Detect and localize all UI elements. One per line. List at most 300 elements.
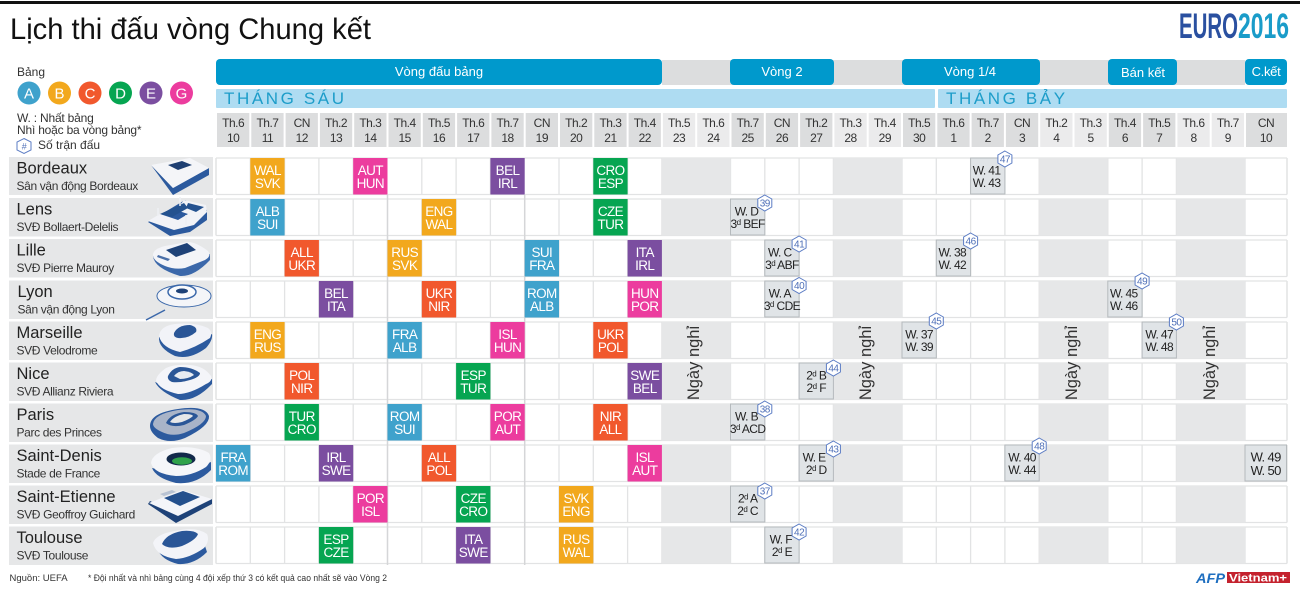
knockout match 43 [799,441,840,481]
day headers: Th.2 [325,116,348,130]
knockout match 41: 3 [765,258,771,272]
match: POL NIR [285,363,319,400]
legend: groups and symbols: E [146,86,156,102]
match: ITA SWE: ITA [464,532,483,547]
day headers: Th.7 [977,116,1000,130]
day headers: Th.4 [394,116,416,130]
knockout match 44: 44 [828,364,839,374]
knockout match 40: W. A [769,286,792,300]
match: SWE BEL: SWE [630,368,660,383]
match: ENG RUS [250,322,285,358]
panel: Saint-Etienne: SVĐ Geoffroy Guichard [16,508,135,522]
knockout match 46 [936,233,978,276]
knockout match 45 [902,313,943,358]
match: IRL SWE: IRL [326,450,347,465]
match: UKR NIR [422,281,456,318]
day headers: Th.7 [497,116,519,130]
panel: Lens [9,197,213,236]
knockout match 45: W. 37 [905,328,934,342]
match: BEL IRL: IRL [498,176,518,191]
day headers: 3 [1019,131,1026,145]
match: WAL SVK [250,158,285,194]
match: CZE CRO: CZE [461,491,486,506]
day headers: CN [774,116,790,130]
knockout match 43: d [812,464,816,473]
legend: groups and symbols: Số trận đấu [38,138,100,152]
match: ROM SUI: SUI [394,422,415,437]
match: ISL AUT [628,445,662,482]
knockout match 41 [765,236,806,276]
knockout match 37: A [748,492,758,506]
day headers: 8 [1190,131,1197,145]
knockout match 37: C [747,504,759,518]
round bars: Vòng đấu bảng [395,64,483,79]
day headers: Th.6 [942,116,965,130]
day headers: Th.7 [737,116,759,130]
panel: Nice: SVĐ Allianz Riviera [16,384,114,398]
match: ENG WAL: ENG [425,204,453,219]
match: ESP TUR: ESP [461,368,486,383]
match: IRL SWE [319,445,353,482]
match: POR ISL: ISL [361,504,381,519]
day headers: Th.7 [1217,116,1240,130]
match: SWE BEL [628,363,662,400]
knockout match 50: W. 47 [1145,328,1174,342]
match: ITA IRL: ITA [636,245,654,260]
knockout match 49: W. 46 [1110,299,1139,313]
match: ROM ALB: ALB [530,299,554,314]
match: RUS WAL: WAL [563,545,591,560]
day headers: 12 [296,131,309,145]
panel: Lille [9,239,213,278]
day headers: 10 [227,131,240,145]
panel: Lyon [9,280,213,320]
knockout match 39: d [737,218,741,227]
rest day labels [685,326,1219,400]
match: SUI FRA: SUI [531,245,552,260]
panel: Nice: Nice [16,365,50,383]
knockout match 50: 50 [1171,318,1182,328]
knockout match 48: W. 40 [1008,450,1037,464]
day headers: 1 [950,131,957,145]
match: RUS WAL: RUS [563,532,590,547]
day headers: 24 [707,131,720,145]
knockout match 47 [971,151,1012,194]
match: AUT HUN: AUT [358,163,383,178]
knockout match 43: W. E [803,450,826,464]
panel: Paris [9,404,213,442]
panel: Lille: Lille [16,242,46,260]
day headers: Th.4 [874,116,897,130]
match: ALB SUI: SUI [257,217,278,232]
match: ALL POL: POL [426,463,453,478]
day headers: 11 [262,131,274,145]
day headers: 10 [1260,131,1273,145]
panel: Saint-Etienne [9,486,213,524]
round bars: C.kết [1252,64,1281,79]
panel: Bordeaux [9,157,213,195]
source note: Nguồn: UEFA [10,573,68,584]
knockout match 37: 2 [738,492,744,506]
day headers: 9 [1225,131,1232,145]
match: UKR POL: UKR [597,327,625,342]
knockout match 42 [765,524,806,563]
panel: Lille: SVĐ Pierre Mauroy [16,261,114,275]
panel: Paris: Parc des Princes [16,426,102,440]
match: POL NIR: NIR [291,381,313,396]
knockout match 39: 3 [731,217,737,231]
day headers: Th.4 [634,116,657,130]
knockout match 38: 38 [760,404,771,416]
match: SVK ENG: ENG [562,504,590,519]
panel: Saint-Denis: Stade de France [16,466,101,480]
knockout match 48: 48 [1034,442,1045,452]
match: ALB SUI [250,199,285,236]
knockout match 44: d [812,370,816,378]
match: POR AUT [490,404,525,440]
knockout match 37 [730,483,772,522]
knockout match 38: ACD [740,422,766,436]
knockout match 46: 46 [966,236,977,248]
knockout match 44: d [813,382,817,391]
match: ROM ALB [525,281,559,318]
match: ENG WAL [422,199,456,236]
match: ISL HUN [490,322,525,358]
match: ALL UKR: ALL [291,245,314,260]
knockout match 39 [730,195,772,235]
match: ALL UKR: UKR [288,258,316,273]
match: BEL ITA [319,281,353,318]
panel: Toulouse: Toulouse [16,529,83,547]
match: HUN POR [628,281,662,318]
match: FRA ALB: FRA [392,327,418,342]
knockout match 44: 2 [807,381,813,395]
match: WAL SVK: WAL [254,163,282,178]
day headers: 6 [1122,131,1129,145]
match: ISL AUT: AUT [632,463,658,478]
legend: groups and symbols: Nhì hoặc ba vòng bảng* [17,123,142,137]
day headers: Th.2 [1045,116,1068,130]
logo: Euro 2016: EURO [1179,7,1238,46]
match: FRA ROM: FRA [221,450,246,465]
day headers: Th.3 [359,116,382,130]
match: UKR NIR: NIR [428,299,451,314]
day headers: 29 [879,131,892,145]
match: ISL AUT: ISL [636,450,655,465]
knockout match 37: d [744,492,748,502]
match: RUS SVK: SVK [392,258,418,273]
day headers: Th.7 [256,116,279,130]
legend: groups and symbols [17,65,193,154]
day headers [222,113,1287,147]
match: UKR POL [593,322,628,358]
panel: Marseille [9,322,213,360]
knockout match 41: ABF [775,258,799,272]
match: ESP TUR [456,363,490,400]
match: BEL IRL: BEL [496,163,520,178]
panel: Bordeaux: Sân vận động Bordeaux [16,179,138,193]
legend: groups and symbols: C [85,86,96,102]
final match [1245,445,1286,481]
final match: W. 49 [1251,450,1281,464]
day headers: 2 [985,131,992,145]
match: POR AUT: POR [494,409,522,424]
knockout match 43: D [816,463,828,477]
match: NIR ALL [593,404,628,440]
match: NIR ALL: NIR [600,409,622,424]
match: ALB SUI: ALB [256,204,280,219]
match: SVK ENG [559,486,593,522]
day headers: 16 [433,131,446,145]
logo: AFP Vietnam+ [1195,570,1290,586]
day headers: Th.3 [840,116,862,130]
match: FRA ALB: ALB [393,340,417,355]
knockout match 43: 2 [806,463,812,477]
match: ALL POL: ALL [428,450,451,465]
knockout match 50 [1142,314,1183,358]
match: POR ISL [353,486,388,522]
legend: groups and symbols: Bảng [17,65,45,79]
match: HUN POR: HUN [631,286,658,301]
knockout match 47: W. 43 [973,176,1001,190]
panel: Bordeaux: Bordeaux [16,160,88,178]
rest day labels: Ngày nghỉ [857,326,875,400]
footnote: * Đội nhất và nhì bảng cùng 4 đội xếp thứ 3 có kết quả cao nhất sẽ vào Vòng 2 [88,573,387,584]
panel: Lens: SVĐ Bollaert-Delelis [16,220,119,234]
match: ROM SUI [388,404,422,440]
schedule grid [216,158,1287,565]
day headers: 30 [913,131,926,145]
match: ROM SUI: ROM [390,409,420,424]
day headers: Th.5 [668,116,691,130]
day headers: Th.6 [1183,116,1205,130]
knockout match 38: 3 [730,422,736,436]
day headers: Th.5 [428,116,451,130]
match: ITA SWE: SWE [459,545,488,560]
knockout match 48 [1005,438,1046,481]
knockout match 38: d [736,423,740,432]
day headers: Th.6 [462,116,485,130]
knockout match 49: W. 45 [1110,286,1139,300]
day headers: Th.6 [702,116,725,130]
match: HUN POR: POR [631,299,659,314]
knockout match 42: 42 [794,528,805,538]
match: AUT HUN: HUN [357,176,384,191]
knockout match 40: 3 [764,299,770,313]
match: AUT HUN [353,158,388,194]
knockout match 50: W. 48 [1145,340,1174,354]
panel: Saint-Etienne: Saint-Etienne [16,488,116,506]
match: CRO ESP: ESP [598,176,624,191]
match: SVK ENG: SVK [564,491,589,506]
knockout match 47: 47 [1000,154,1011,166]
match: ENG RUS: RUS [254,340,281,355]
panel: Saint-Denis [9,444,213,483]
rest day labels: Ngày nghỉ [1063,326,1081,400]
match: NIR ALL: ALL [599,422,623,437]
match: ROM ALB: ROM [527,286,557,301]
round bars [216,59,1287,85]
legend: groups and symbols: A [24,86,34,102]
month bars: THÁNG SÁU [224,89,347,108]
match: SUI FRA [525,240,559,276]
knockout match 39: 39 [760,198,771,210]
knockout match 42: 2 [772,545,778,559]
knockout match 45: W. 39 [905,340,934,354]
day headers: CN [294,116,310,130]
panel: Lens: Lens [16,200,52,218]
legend: groups and symbols: # [22,142,27,152]
match: RUS WAL [559,527,593,564]
day headers: Th.5 [908,116,931,130]
knockout match 40: CDE [774,299,801,313]
match: ISL HUN: HUN [494,340,521,355]
panel: Nice [9,362,213,401]
day headers: 26 [776,131,789,145]
day headers: 20 [570,131,583,145]
match: ALL UKR [285,240,319,276]
match: CZE CRO: CRO [459,504,487,519]
knockout match 39: W. D [735,204,759,218]
panel: Saint-Denis: Saint-Denis [16,447,102,465]
knockout match 42: d [778,546,782,555]
panel: Toulouse [9,526,213,565]
knockout match 44 [799,360,840,399]
match: BEL ITA: BEL [324,286,349,301]
match: ITA IRL [628,240,662,276]
match: RUS SVK [388,240,422,276]
knockout match 49 [1108,273,1149,317]
knockout match 42: W. F [770,532,792,546]
match: ITA SWE [456,527,490,564]
knockout match 44: 2 [806,368,812,382]
day headers: 15 [398,131,412,145]
match: BEL IRL [490,158,525,194]
logo: AFP Vietnam+: AFP [1195,570,1226,586]
match: ENG WAL: WAL [425,217,454,232]
match: POL NIR: POL [289,368,315,383]
legend: groups and symbols: D [115,86,126,102]
day headers: Th.2 [805,116,828,130]
match: RUS SVK: RUS [391,245,419,260]
day headers: Th.3 [599,116,622,130]
day headers: 22 [639,131,652,145]
match: UKR POL: POL [598,340,624,355]
knockout match 37: d [743,505,747,514]
knockout match 38 [730,401,772,440]
legend: groups and symbols: G [176,86,187,102]
day headers: Th.6 [222,116,245,130]
knockout match 40: 40 [794,281,805,292]
knockout match 43: 43 [828,444,839,456]
match: ITA IRL: IRL [635,258,655,273]
knockout match 42: E [782,545,793,559]
match: BEL ITA: ITA [327,299,346,314]
knockout match 38: W. B [735,410,759,424]
panel: Lyon: Lyon [18,283,53,301]
day headers: 21 [604,131,617,145]
month bars [216,89,1287,108]
match: SUI FRA: FRA [529,258,555,273]
title: Lịch thi đấu vòng Chung kết [10,13,372,46]
day headers: Th.3 [1080,116,1102,130]
knockout match 41: d [771,259,775,268]
day headers: CN [534,116,550,130]
knockout match 44: F [816,381,826,395]
match: POR ISL: POR [357,491,385,506]
day headers: 4 [1053,131,1060,145]
match: ESP CZE [319,527,353,564]
day headers: 17 [467,131,480,145]
day headers: 18 [501,131,515,145]
logo: AFP Vietnam+: Vietnam+ [1229,572,1287,584]
knockout match 46: W. 42 [938,258,967,272]
day headers: 23 [673,131,686,145]
day headers: Th.2 [565,116,588,130]
match: TUR CRO [285,404,319,440]
day headers: 13 [330,131,343,145]
round bars: Vòng 1/4 [944,64,996,79]
match: CZE CRO [456,486,490,522]
knockout match 47: W. 41 [973,164,1001,178]
match: CRO ESP: CRO [596,163,625,178]
day headers: 25 [741,131,755,145]
panel: Paris: Paris [16,406,54,424]
round bars: Vòng 2 [761,64,803,79]
match: ENG RUS: ENG [254,327,281,342]
month bars: THÁNG BẢY [946,89,1068,108]
round bars: Bán kết [1121,65,1165,80]
match: ISL HUN: ISL [498,327,518,342]
knockout match 46: W. 38 [938,246,967,260]
match: FRA ROM: ROM [218,463,248,478]
panel: Toulouse: SVĐ Toulouse [16,548,89,562]
match: CRO ESP [593,158,628,194]
match: SWE BEL: BEL [633,381,658,396]
knockout match 37: 2 [737,504,743,518]
day headers: Th.4 [1114,116,1137,130]
match: CZE TUR [593,199,628,236]
day headers: CN [1258,116,1274,130]
knockout match 41: W. C [768,246,793,260]
legend: groups and symbols: W. : Nhất bảng [17,111,94,125]
rest day labels: Ngày nghỉ [685,326,703,400]
knockout match 40 [764,278,806,317]
match: FRA ALB [388,322,422,358]
day headers: 27 [810,131,823,145]
match: CZE TUR: CZE [598,204,624,219]
final match: W. 50 [1251,463,1281,478]
legend: groups and symbols: B [54,86,65,102]
match: ESP CZE: ESP [323,532,349,547]
day headers: 14 [364,131,377,145]
knockout match 44: B [816,368,827,382]
knockout match 41: 41 [794,240,805,250]
match: WAL SVK: SVK [255,176,281,191]
match: TUR CRO: CRO [288,422,316,437]
panel: Lyon: Sân vận động Lyon [18,302,115,316]
knockout match 39: BEF [740,217,765,231]
match: FRA ROM [216,445,250,482]
day headers: CN [1014,116,1030,130]
day headers: 19 [536,131,549,145]
match: POR AUT: AUT [495,422,521,437]
panel: Marseille: SVĐ Velodrome [16,344,98,358]
match: UKR NIR: UKR [426,286,453,301]
match: ALL POL [422,445,456,482]
panel: Marseille: Marseille [16,324,83,342]
match: ESP TUR: TUR [460,381,487,396]
